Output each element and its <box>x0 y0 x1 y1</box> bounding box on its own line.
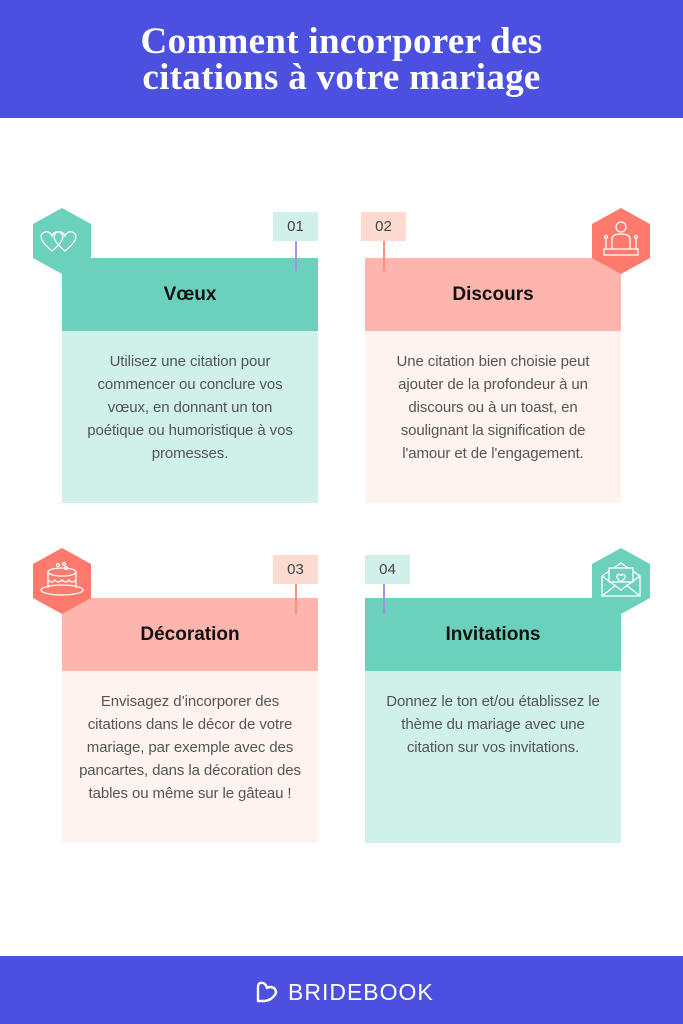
header decoration: Décoration <box>140 624 240 645</box>
header discours: Discours <box>452 284 534 305</box>
text discours: soulignant la signification de <box>401 422 585 439</box>
connector line <box>383 241 384 271</box>
text voeux: vœux, en donnant un ton <box>108 399 272 416</box>
icon: hearts <box>33 208 91 274</box>
connector line <box>383 584 384 614</box>
number 02: 02 <box>375 218 392 235</box>
text invitations: citation sur vos invitations. <box>407 739 579 756</box>
icon: cake <box>33 548 91 614</box>
text decoration: Envisagez d’incorporer des <box>101 693 279 710</box>
connector line <box>295 584 296 614</box>
text voeux: poétique ou humoristique à vos <box>87 422 293 439</box>
panel: discours <box>361 208 650 503</box>
text discours: Une citation bien choisie peut <box>397 353 589 370</box>
text voeux: commencer ou conclure vos <box>97 376 283 393</box>
text discours: ajouter de la profondeur à un <box>398 376 588 393</box>
text discours: l'amour et de l'engagement. <box>402 445 584 462</box>
title: citations à votre mariage <box>142 57 541 98</box>
header invitations <box>365 598 621 671</box>
number 03 <box>273 555 318 584</box>
header discours <box>365 258 621 331</box>
number 01 <box>273 212 318 241</box>
header invitations: Invitations <box>445 624 540 645</box>
text decoration: citations dans le décor de votre <box>88 716 292 733</box>
text discours: discours ou à un toast, en <box>408 399 578 416</box>
logo bridebook: BRIDEBOOK <box>288 979 434 1005</box>
number 04 <box>365 555 410 584</box>
text decoration: mariage, par exemple avec des <box>87 739 293 756</box>
text invitations: Donnez le ton et/ou établissez le <box>386 693 600 710</box>
number 01: 01 <box>287 218 304 235</box>
text voeux: Utilisez une citation pour <box>110 353 270 370</box>
icon: envelope <box>592 548 650 614</box>
header voeux <box>62 258 318 331</box>
icon: speaker <box>592 208 650 274</box>
text invitations <box>365 671 621 843</box>
text decoration <box>62 671 318 843</box>
text voeux: promesses. <box>152 445 228 462</box>
text voeux <box>62 331 318 503</box>
connector line <box>295 241 296 271</box>
text discours <box>365 331 621 503</box>
footer <box>0 956 683 1024</box>
header decoration <box>62 598 318 671</box>
number 02 <box>361 212 406 241</box>
title: Comment incorporer des <box>141 21 542 62</box>
title <box>0 0 683 118</box>
text invitations: thème du mariage avec une <box>401 716 585 733</box>
panel: voeux <box>33 208 318 503</box>
text decoration: pancartes, dans la décoration des <box>79 762 301 779</box>
panel: invitations <box>365 548 650 843</box>
header voeux: Vœux <box>164 284 216 305</box>
number 03: 03 <box>287 561 304 578</box>
text decoration: tables ou même sur le gâteau ! <box>89 785 291 802</box>
number 04: 04 <box>379 561 396 578</box>
panel: decoration <box>33 548 318 843</box>
